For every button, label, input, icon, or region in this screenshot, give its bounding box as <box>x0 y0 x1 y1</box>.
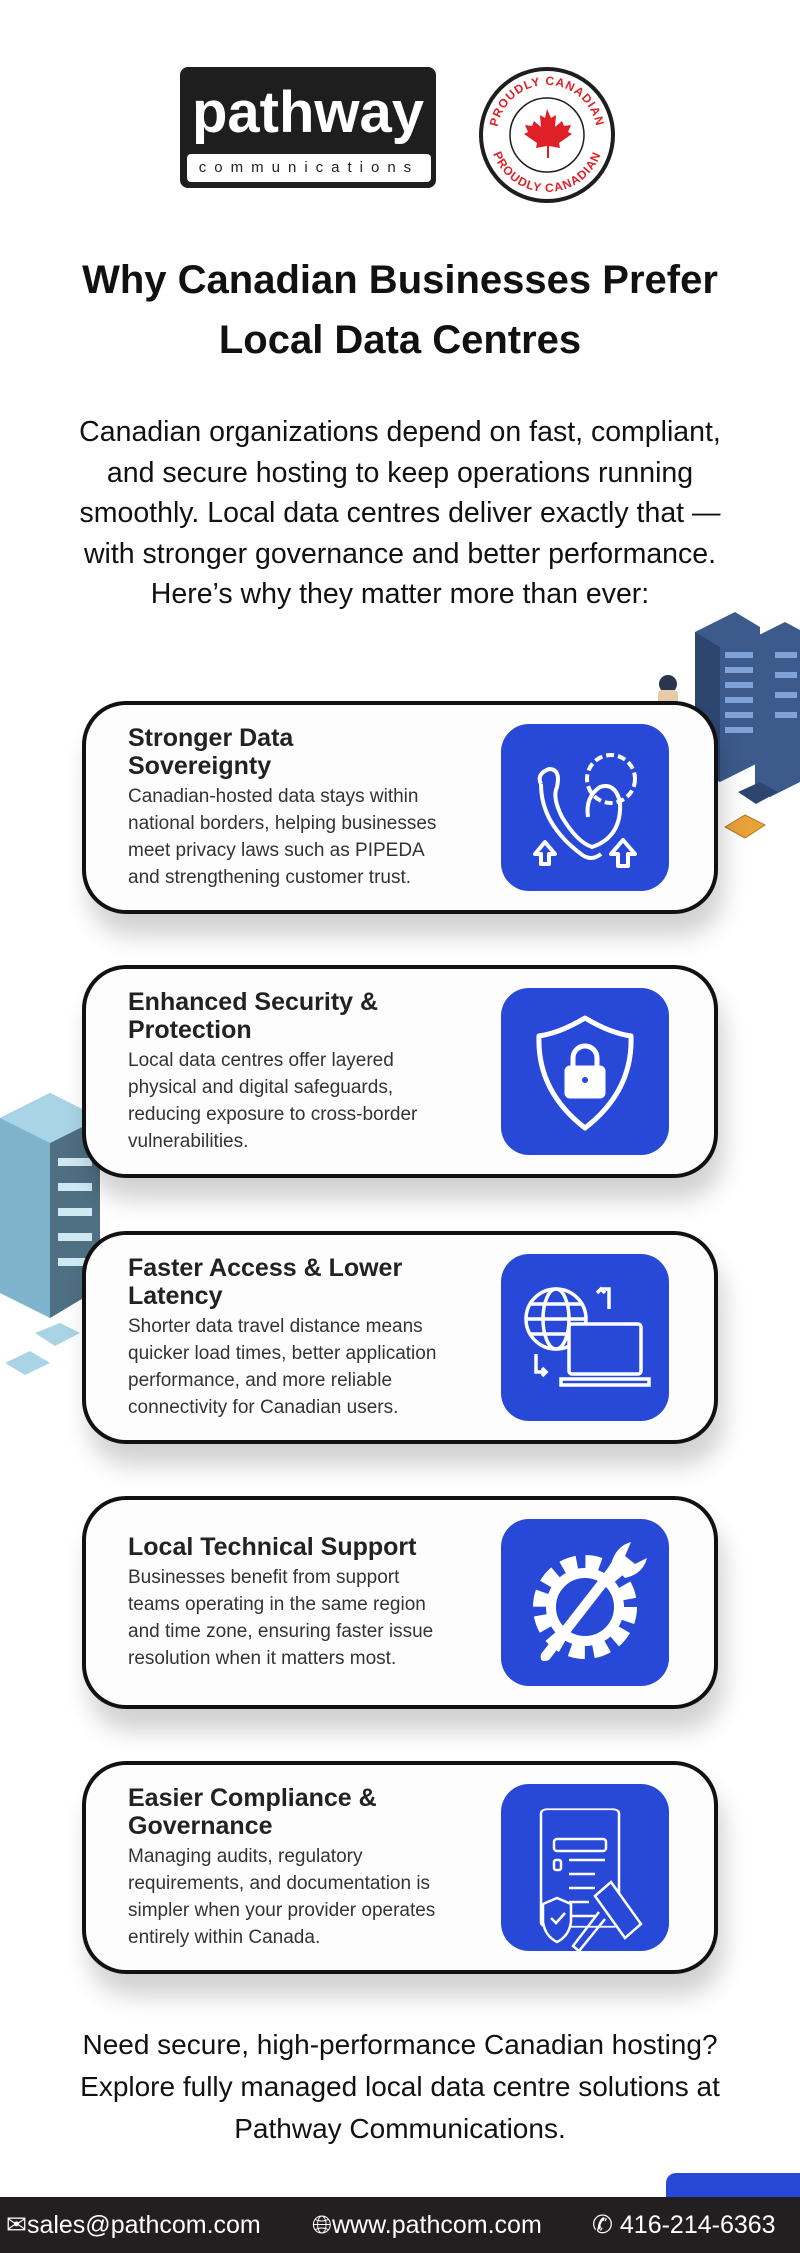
text block: vulnerabilities. <box>128 1131 248 1152</box>
text block: Easier Compliance & <box>128 1784 377 1812</box>
text block: simpler when your provider operates <box>128 1900 435 1921</box>
text block: and strengthening customer trust. <box>128 867 411 888</box>
text block: and time zone, ensuring faster issue <box>128 1621 433 1642</box>
icon: gear and wrench <box>501 1519 669 1686</box>
title <box>82 258 718 362</box>
text block: Shorter data travel distance means <box>128 1316 423 1337</box>
contact: phone: ✆ 416-214-6363 <box>592 2211 776 2239</box>
accent tab <box>666 2173 800 2201</box>
text block: Governance <box>128 1812 273 1840</box>
text block: requirements, and documentation is <box>128 1873 430 1894</box>
text block: teams operating in the same region <box>128 1594 426 1615</box>
contact: email: ✉sales@pathcom.com <box>6 2211 261 2239</box>
text block: entirely within Canada. <box>128 1927 320 1948</box>
text block <box>128 988 417 1152</box>
logo subtitle <box>187 154 431 182</box>
illustration: server racks top right <box>658 612 800 839</box>
intro text: Here’s why they matter more than ever: <box>151 578 649 610</box>
panel: enhanced security & protection <box>82 965 718 1178</box>
text block: Managing audits, regulatory <box>128 1846 362 1867</box>
text block: reducing exposure to cross-border <box>128 1104 417 1125</box>
badge: proudly canadian: PROUDLY CANADIAN <box>493 151 600 192</box>
badge: proudly canadian: PROUDLY CANADIAN <box>490 76 604 126</box>
panel: faster access & lower latency <box>82 1231 718 1444</box>
intro text: smoothly. Local data centres deliver exactly that — <box>79 497 721 529</box>
text block: Faster Access & Lower <box>128 1254 402 1282</box>
icon: shield lock <box>501 988 669 1155</box>
text block <box>128 724 436 888</box>
text block: Enhanced Security & <box>128 988 378 1016</box>
text block: resolution when it matters most. <box>128 1648 396 1669</box>
icon: document, shield and gavel <box>501 1784 669 1951</box>
text block: Sovereignty <box>128 752 271 780</box>
intro text <box>79 416 721 610</box>
logo wordmark: pathway <box>192 80 424 145</box>
text block: quicker load times, better application <box>128 1343 436 1364</box>
text block: national borders, helping businesses <box>128 813 436 834</box>
icon: strength arm gear <box>501 724 669 891</box>
icon: globe and laptop <box>501 1254 669 1421</box>
text block: Local data centres offer layered <box>128 1050 394 1071</box>
text block: Local Technical Support <box>128 1533 416 1561</box>
panel: easier compliance & governance <box>82 1761 718 1974</box>
call to action text: Need secure, high-performance Canadian hosting? <box>82 2029 718 2060</box>
call to action text: Explore fully managed local data centre solutions at <box>80 2071 720 2102</box>
text block: Protection <box>128 1016 252 1044</box>
text block <box>128 1784 435 1948</box>
text block: Stronger Data <box>128 724 293 752</box>
intro text: Canadian organizations depend on fast, compliant, <box>79 416 721 448</box>
illustration: server tower left <box>0 1093 100 1375</box>
logo subtitle: communications <box>199 159 419 176</box>
text block <box>128 1254 436 1418</box>
panel: stronger data sovereignty <box>82 701 718 914</box>
call to action text <box>80 2029 720 2144</box>
footer: contact bar <box>0 2197 800 2253</box>
title: Local Data Centres <box>219 318 581 362</box>
text block: performance, and more reliable <box>128 1370 392 1391</box>
text block: Canadian-hosted data stays within <box>128 786 418 807</box>
intro text: and secure hosting to keep operations running <box>107 456 693 488</box>
text block <box>128 1533 433 1669</box>
text block: connectivity for Canadian users. <box>128 1397 398 1418</box>
title: Why Canadian Businesses Prefer <box>82 258 718 302</box>
text block: Latency <box>128 1282 222 1310</box>
panel: local technical support <box>82 1496 718 1709</box>
contact: website: 🌐︎www.pathcom.com <box>312 2211 542 2239</box>
intro text: with stronger governance and better performance. <box>84 538 716 570</box>
call to action text: Pathway Communications. <box>234 2113 566 2144</box>
logo: pathway communications <box>180 67 436 188</box>
text block: meet privacy laws such as PIPEDA <box>128 840 425 861</box>
text block: physical and digital safeguards, <box>128 1077 393 1098</box>
text block: Businesses benefit from support <box>128 1567 399 1588</box>
badge: proudly canadian <box>479 67 615 203</box>
